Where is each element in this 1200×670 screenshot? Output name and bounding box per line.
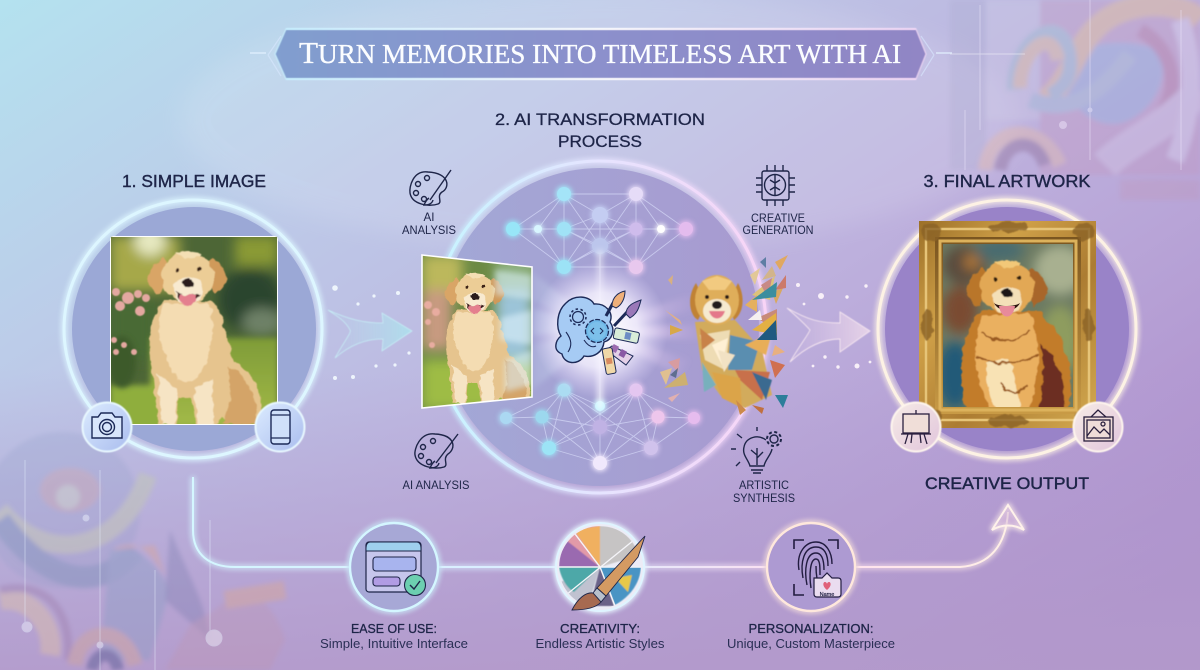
warped source photo with scan beams (422, 255, 535, 410)
panel: AI transformation process (422, 161, 788, 493)
painting: golden retriever portrait (943, 244, 1073, 407)
annotation: AI analysis bottom: AI ANALYSIS (402, 478, 470, 492)
feature: ease of use: EASE OF USE: (351, 621, 437, 636)
creative output label: CREATIVE OUTPUT (925, 475, 1089, 493)
step 2 heading: PROCESS (558, 132, 642, 151)
icon: AI brain with brushes (556, 291, 641, 375)
brushes (606, 303, 613, 316)
feature: creativity: Endless Artistic Styles (536, 637, 664, 651)
arrow: process to artwork (787, 283, 871, 369)
feature: personalization (727, 523, 895, 651)
icon: easel (892, 402, 940, 452)
arrow: image to process (328, 285, 412, 380)
annotation: creative generation: CREATIVE (751, 211, 805, 225)
icon: palette bottom (415, 434, 458, 468)
step 2 heading: 2. AI TRANSFORMATION (495, 110, 705, 129)
feature: personalization: Unique, Custom Masterpiece (727, 637, 895, 651)
fractured mosaic dog (658, 255, 788, 415)
icon: interface window (350, 523, 438, 611)
annotation: artistic synthesis: SYNTHESIS (733, 491, 795, 505)
feature: creativity: CREATIVITY: (560, 621, 640, 636)
bottom connector flow (193, 477, 1024, 567)
icon: AI chip brain (756, 165, 795, 206)
neural network: top (506, 187, 693, 463)
annotation: AI analysis top: ANALYSIS (402, 223, 456, 237)
photo: golden retriever in garden (110, 236, 278, 425)
annotation: artistic synthesis (731, 427, 795, 505)
feature: ease of use (320, 523, 468, 651)
annotation: AI analysis top (402, 170, 456, 237)
title banner (250, 29, 952, 79)
icon: palette top (410, 170, 451, 205)
annotation: artistic synthesis: ARTISTIC (739, 478, 789, 492)
decorative code streams: top right (950, 0, 1181, 170)
swatches (613, 328, 640, 344)
shard particles (658, 255, 788, 415)
annotation: creative generation (742, 165, 814, 237)
icon: framed picture (1074, 402, 1122, 452)
icon: fingerprint with name tag: Name (820, 592, 834, 598)
decorative code streams: bottom left (22, 460, 222, 670)
step 3 heading: 3. FINAL ARTWORK (924, 171, 1091, 191)
panel: final artwork (878, 200, 1136, 458)
icon: phone (256, 402, 304, 452)
gold frame (919, 221, 1096, 428)
decorative swirls: top right (950, 0, 1200, 200)
decorative swirls: bottom left (0, 432, 285, 670)
icon: fingerprint with name tag (767, 523, 855, 611)
icon: art styles wheel with brush (556, 523, 645, 611)
light beams (532, 250, 700, 410)
icon: camera (82, 402, 132, 452)
icon: light bulb with gear (731, 427, 781, 473)
feature: personalization: PERSONALIZATION: (748, 621, 874, 636)
title text: TURN MEMORIES INTO TIMELESS ART WITH AI (299, 35, 901, 70)
step 1 heading: 1. SIMPLE IMAGE (122, 171, 266, 191)
annotation: AI analysis top: AI (424, 210, 434, 224)
step 2 heading (495, 110, 705, 151)
feature: creativity (536, 523, 664, 651)
panel: simple image (64, 200, 322, 458)
feature: ease of use: Simple, Intuitive Interface (320, 637, 468, 651)
annotation: AI analysis bottom (402, 434, 470, 492)
arrow: output arrowhead (992, 505, 1024, 530)
annotation: creative generation: GENERATION (742, 223, 814, 237)
neural network: bottom (500, 384, 700, 470)
